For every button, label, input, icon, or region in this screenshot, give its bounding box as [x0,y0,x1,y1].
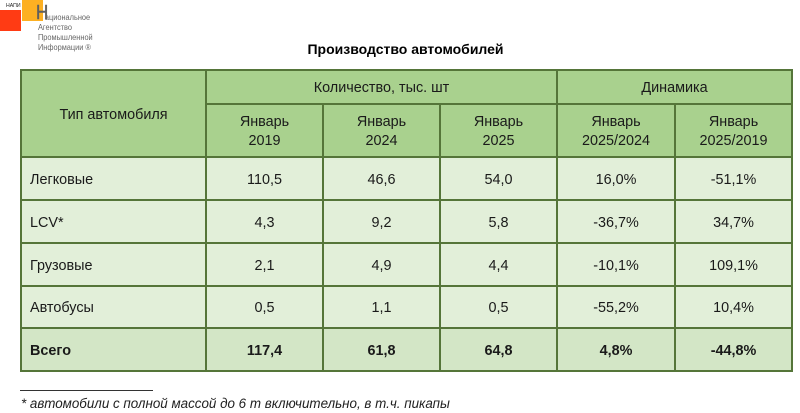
table: car production: Динамика [641,80,708,96]
table: car production: 117,4 [247,342,282,358]
logo: agency name [38,12,93,52]
table: car production: 110,5 [247,172,282,188]
table: car production: Количество, тыс. шт [314,80,449,96]
table: car production: 16,0% [596,172,636,188]
table: car production: -51,1% [711,172,756,188]
table: car production: 2,1 [254,258,274,274]
table: car production: Автобусы [30,300,94,316]
table: car production: 61,8 [367,342,396,358]
logo: small label: НАПИ [6,3,21,9]
table: car production: 4,3 [254,214,274,230]
table: car production: Январь [357,114,406,130]
logo: agency name: ациональное [45,12,90,22]
table: car production: Легковые [30,172,93,188]
table: car production: 2025 [482,133,515,149]
title: Производство автомобилей [307,41,504,57]
table: car production: 109,1% [709,258,758,274]
table: car production: 4,4 [488,258,509,274]
table: car production: 0,5 [488,300,509,316]
table: car production: 2024 [365,133,398,149]
table: car production: 10,4% [713,300,754,316]
table: car production: 34,7% [713,214,754,230]
table: car production: Тип автомобиля [59,106,168,122]
table: car production: 64,8 [484,342,513,358]
table: car production: Всего [30,342,71,358]
table: car production: 2025/2019 [700,133,768,149]
logo: orange square [22,0,43,21]
table: car production: -55,2% [593,300,639,316]
logo: agency name: Информации ® [38,42,91,52]
table: car production: Январь [709,114,758,130]
table: car production: Грузовые [30,258,92,274]
table: car production: 4,9 [371,258,392,274]
table: car production: Январь [474,114,523,130]
table: car production: Январь [591,114,641,130]
logo: large letter: Н [36,2,48,24]
table: car production: -10,1% [593,258,639,274]
logo: agency name: Агентство [38,22,72,32]
table: car production: 46,6 [367,172,396,188]
table: car production: LCV* [30,214,64,230]
logo: red square [0,10,21,31]
table: car production [20,69,793,372]
table: car production: 2025/2024 [582,133,650,149]
table: car production: 9,2 [371,214,392,230]
table: car production: 0,5 [254,300,274,316]
table: car production: 1,1 [371,300,392,316]
table: car production: 2019 [248,133,280,149]
table: car production: -36,7% [593,214,639,230]
table: car production: Январь [240,114,289,130]
table: car production: 4,8% [600,342,632,358]
logo: agency name: Промышленной [38,32,93,42]
logo [0,0,93,52]
table: car production: -44,8% [711,342,756,358]
table: car production: 5,8 [488,214,509,230]
footnote: * автомобили с полной массой до 6 т включительно, в т.ч. пикапы [21,396,450,411]
table: car production: 54,0 [484,172,513,188]
